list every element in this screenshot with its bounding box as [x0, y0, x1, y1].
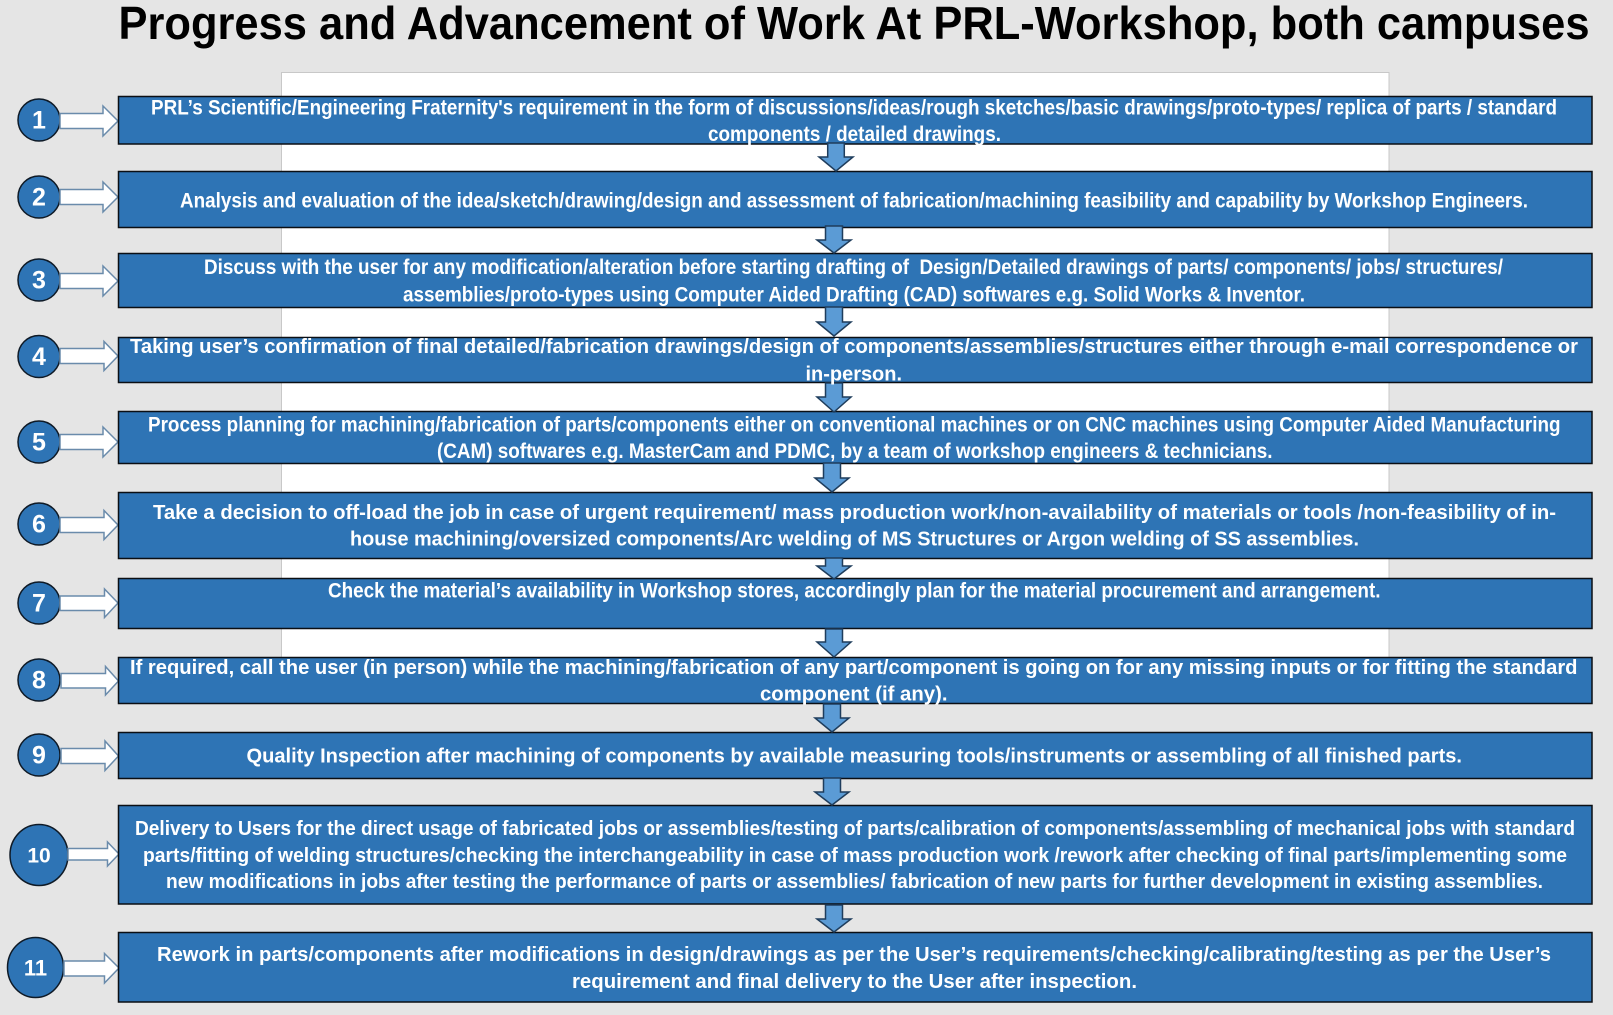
number badge 9: 9	[32, 742, 46, 770]
step 1 text	[151, 96, 1557, 146]
number badge 10: 10	[27, 844, 51, 868]
number badge 1: 1	[32, 106, 46, 134]
step 10 text	[135, 818, 1575, 893]
number badge 2	[18, 176, 60, 218]
step box 6	[118, 492, 1592, 558]
number badge 8	[18, 659, 60, 701]
step 4	[18, 336, 1592, 382]
step 4 text	[130, 336, 1578, 386]
step 7 text: Check the material’s availability in Workshop stores, accordingly plan for the material procurement and arrangement.	[328, 580, 1380, 602]
arrow: badge 1 to box	[60, 106, 118, 136]
arrow: step 5 to 6	[815, 463, 849, 492]
step box 9	[118, 732, 1592, 778]
number badge 2: 2	[32, 184, 46, 212]
step 11	[8, 932, 1592, 1002]
number badge 4	[18, 336, 60, 378]
step 11 text	[157, 944, 1551, 993]
step 5 text	[148, 414, 1560, 463]
arrow: step 1 to 2	[819, 143, 853, 171]
number badge 4: 4	[32, 343, 46, 371]
number badge 8: 8	[32, 666, 46, 694]
number badge 5: 5	[32, 428, 46, 456]
arrow: badge 7 to box	[60, 589, 118, 618]
number badge 6	[18, 503, 60, 545]
step box 8	[118, 658, 1592, 704]
number badge 9	[18, 734, 60, 776]
step 3	[18, 254, 1592, 308]
arrow: step 7 to 8	[817, 629, 851, 657]
step box 4	[118, 338, 1592, 382]
step box 2	[118, 172, 1592, 228]
step 1	[18, 96, 1592, 144]
step 10 text: Delivery to Users for the direct usage of fabricated jobs or assemblies/testing of parts/calibration of components/assembling of mechanical jobs with standard	[135, 818, 1575, 840]
step box 1	[118, 96, 1592, 144]
number badge 11: 11	[24, 956, 47, 980]
step box 7	[118, 578, 1592, 628]
arrow: badge 9 to box	[61, 741, 118, 770]
step box 5	[118, 412, 1592, 464]
step 6 text	[153, 502, 1556, 550]
step 4 text: in-person.	[806, 364, 902, 386]
arrow: step 9 to 10	[815, 778, 849, 805]
step 3 text	[204, 256, 1503, 306]
arrow: step 6 to 7	[817, 558, 851, 579]
step 6 text: house machining/oversized components/Arc welding of MS Structures or Argon welding of SS assemblies.	[350, 528, 1359, 550]
step 5 text: (CAM) softwares e.g. MasterCam and PDMC, by a team of workshop engineers & technicians.	[437, 440, 1272, 463]
step 6	[18, 492, 1592, 558]
step 9	[18, 732, 1592, 778]
arrow: step 4 to 5	[817, 383, 851, 412]
number badge 7	[18, 582, 60, 624]
step 10 text: new modifications in jobs after testing the performance of parts or assemblies/ fabrication of new parts for further development in existing assemblies.	[166, 871, 1543, 893]
step box 3	[118, 254, 1592, 308]
number badge 5	[18, 421, 60, 463]
number badge 7: 7	[32, 590, 46, 618]
step 7	[18, 578, 1592, 628]
step 8 text	[130, 657, 1577, 706]
number badge 11	[8, 938, 64, 998]
arrow: badge 5 to box	[60, 427, 118, 457]
arrow: step 2 to 3	[817, 226, 851, 253]
arrow: step 3 to 4	[817, 307, 851, 336]
arrow: step 10 to 11	[817, 905, 851, 932]
step 6 text: Take a decision to off-load the job in case of urgent requirement/ mass production work/non-availability of materials or tools /non-feasibility of in-	[153, 502, 1556, 524]
number badge 3	[18, 259, 60, 301]
step 3 text: assemblies/proto-types using Computer Aided Drafting (CAD) softwares e.g. Solid Works & Inventor.	[403, 284, 1305, 306]
arrow: badge 8 to box	[61, 666, 118, 695]
arrow: badge 4 to box	[60, 342, 118, 370]
step box 10	[118, 806, 1592, 904]
arrow: badge 2 to box	[60, 182, 118, 212]
step box 11	[118, 932, 1592, 1002]
step 5	[18, 412, 1592, 464]
arrow: step 8 to 9	[815, 704, 849, 732]
step 9 text: Quality Inspection after machining of components by available measuring tools/instruments or assembling of all finished parts.	[246, 746, 1462, 768]
number badge 1	[18, 99, 60, 141]
step 1 text: components / detailed drawings.	[708, 123, 1001, 146]
step 11 text: requirement and final delivery to the User after inspection.	[572, 971, 1137, 993]
arrow: badge 6 to box	[60, 510, 118, 540]
step 4 text: Taking user’s confirmation of final detailed/fabrication drawings/design of components/assemblies/structures either through e-mail correspondence or	[130, 336, 1578, 358]
number badge 10	[10, 824, 68, 886]
step 8	[18, 658, 1592, 704]
step 3 text: Discuss with the user for any modification/alteration before starting drafting of Design/Detailed drawings of parts/ components/ jobs/ structures/	[204, 256, 1503, 279]
step 8 text: If required, call the user (in person) while the machining/fabrication of any part/component is going on for any missing inputs or for fitting the standard	[130, 657, 1577, 679]
arrow: badge 10 to box	[68, 842, 119, 866]
step 11 text: Rework in parts/components after modifications in design/drawings as per the User’s requirements/checking/calibrating/testing as per the User’s	[157, 944, 1551, 966]
arrow: badge 11 to box	[64, 954, 119, 983]
number badge 6: 6	[32, 510, 46, 538]
arrow: badge 3 to box	[60, 266, 118, 296]
panel: white background	[282, 72, 1389, 662]
number badge 3: 3	[32, 266, 46, 294]
step 8 text: component (if any).	[760, 684, 948, 706]
step 10 text: parts/fitting of welding structures/checking the interchangeability in case of mass production work /rework after checking of final parts/implementing some	[143, 845, 1567, 867]
step 2	[18, 172, 1592, 228]
step 10	[10, 806, 1592, 904]
